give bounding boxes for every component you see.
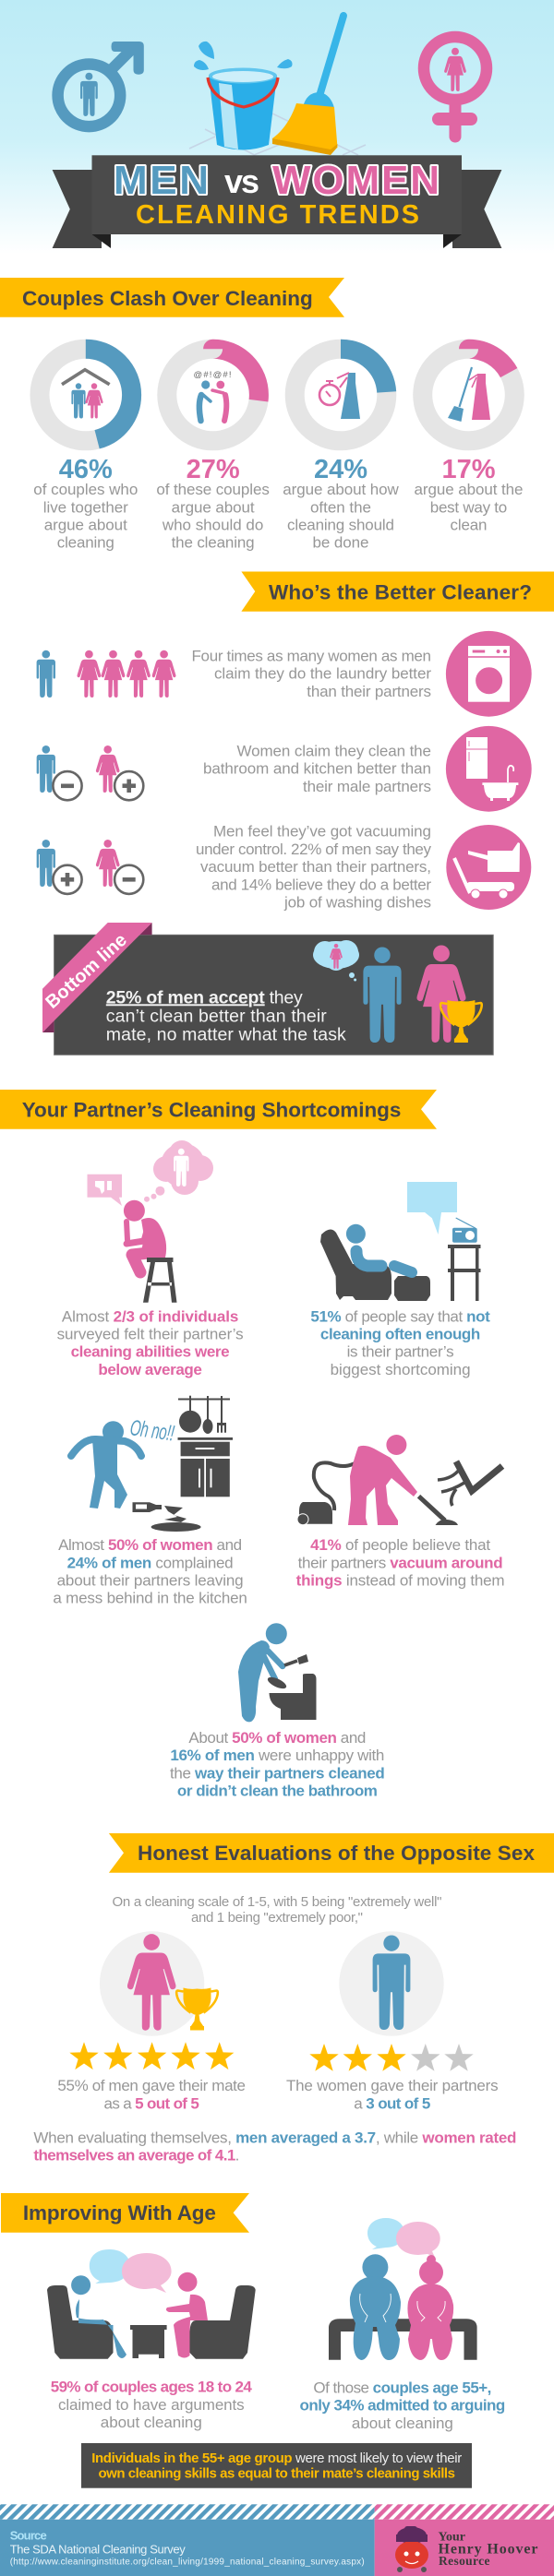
stat 46%: argue about bbox=[44, 516, 127, 533]
resource panel: Resource bbox=[439, 2554, 489, 2568]
source panel: (http://www.cleaninginstitute.org/clean_living/1999_national_cleaning_survey.aspx) bbox=[10, 2557, 365, 2567]
title ribbon: WOMEN bbox=[272, 158, 440, 203]
text: ages 18 to 24: about cleaning bbox=[101, 2414, 202, 2431]
row: bathroom figures bbox=[37, 745, 143, 800]
text: bathroom: Women claim they clean the bbox=[236, 742, 431, 759]
text: laundry: Four times as many women as men bbox=[192, 648, 431, 665]
text: 51% bbox=[310, 1307, 490, 1378]
banner bbox=[241, 572, 554, 612]
icon: washing machine bbox=[446, 631, 532, 717]
text: two thirds: cleaning abilities were bbox=[71, 1343, 230, 1361]
text: vacuum around: 41% of people believe that bbox=[310, 1536, 490, 1554]
scene: man in recliner with radio bbox=[320, 1182, 480, 1301]
text: bathroom complaint: or didn’t clean the bathroom bbox=[177, 1783, 378, 1800]
icon: arguing couple: @#!@#! bbox=[194, 370, 231, 380]
heading: Couples Clash Over Cleaning bbox=[22, 287, 313, 310]
text: kitchen bbox=[53, 1536, 247, 1606]
resource panel: Your bbox=[438, 2530, 465, 2544]
ottoman bbox=[394, 1276, 430, 1301]
icon: bucket bbox=[208, 68, 278, 149]
panel bbox=[54, 935, 493, 1055]
icon: cart bbox=[446, 825, 531, 910]
oh no text: Oh no!! bbox=[128, 1416, 176, 1447]
row: vacuum figures bbox=[37, 840, 143, 894]
scene: vacuuming around chair bbox=[297, 1435, 502, 1525]
icon: stopwatch and spray bbox=[319, 373, 360, 419]
donut 17% bbox=[423, 349, 514, 441]
text: vacuuming: vacuum better than their partners, bbox=[200, 858, 431, 876]
text: bathroom: their male partners bbox=[303, 778, 431, 795]
cabinet bbox=[177, 1437, 233, 1497]
figure: woman bbox=[348, 1435, 417, 1525]
stat 24% bbox=[283, 455, 399, 551]
text: 25% of men accept they bbox=[106, 987, 303, 1008]
text: ages 18 to 24 bbox=[51, 2379, 252, 2431]
source panel: Source bbox=[10, 2528, 47, 2542]
icon: male symbol bbox=[58, 42, 144, 126]
stat 27%: who should do bbox=[162, 516, 263, 533]
figure: man bbox=[238, 1623, 287, 1722]
section: who's the better cleaner bbox=[37, 572, 554, 911]
text: age 55+: about cleaning bbox=[352, 2415, 453, 2432]
text: age 55+: only 34% admitted to arguing bbox=[300, 2397, 505, 2415]
text: two thirds: below average bbox=[98, 1361, 202, 1378]
stat 46%: 46% bbox=[59, 455, 113, 484]
text: kitchen: about their partners leaving bbox=[57, 1571, 244, 1589]
resource panel bbox=[375, 2520, 554, 2576]
text: self evaluation: When evaluating themselves, men averaged a 3.7, while women rated bbox=[33, 2129, 516, 2146]
vacuum canister and hose bbox=[297, 1462, 458, 1525]
figure: man bbox=[363, 947, 402, 1043]
icon: plus bbox=[114, 771, 143, 800]
text: vacuum around bbox=[296, 1536, 505, 1589]
icon: couple under roof bbox=[62, 370, 110, 419]
text: vacuuming bbox=[196, 823, 432, 911]
icon: thought cloud bbox=[313, 940, 359, 982]
row: laundry figures bbox=[37, 650, 175, 698]
speech bubbles bbox=[90, 2249, 172, 2293]
text: bathroom complaint bbox=[170, 1729, 385, 1800]
stat 17%: best way to bbox=[430, 498, 507, 516]
text: 51%: biggest shortcoming bbox=[331, 1361, 471, 1378]
text: bathroom complaint: the way their partners cleaned bbox=[170, 1764, 385, 1782]
icon: female symbol bbox=[424, 37, 487, 137]
intro text: On a cleaning scale of 1-5, with 5 being "extremely well" bbox=[113, 1894, 441, 1910]
icon: water drops bbox=[194, 42, 292, 70]
left armchair bbox=[47, 2285, 113, 2359]
text: ages 18 to 24: claimed to have arguments bbox=[58, 2396, 245, 2414]
banner bbox=[0, 278, 344, 317]
caption: women rated: as a 5 out of 5 bbox=[104, 2095, 199, 2113]
banner bbox=[0, 1090, 437, 1129]
title: men vs women: MEN bbox=[114, 158, 209, 203]
man rating bbox=[339, 1931, 444, 2036]
stat 27%: 27% bbox=[187, 455, 240, 484]
stat 46%: of couples who bbox=[33, 481, 138, 498]
figure: seated man bbox=[71, 2275, 126, 2358]
stat 46%: live together bbox=[43, 498, 128, 516]
intro text: and 1 being "extremely poor," bbox=[191, 1910, 363, 1926]
icon: trophy bbox=[176, 1987, 218, 2030]
five stars bbox=[69, 2042, 234, 2069]
text: ages 18 to 24: 59% of couples ages 18 to 24 bbox=[51, 2379, 252, 2396]
figure: man bbox=[71, 1421, 141, 1509]
text: 51%: is their partner’s bbox=[347, 1343, 454, 1361]
figure: seated woman bbox=[166, 2272, 208, 2358]
heading: Improving With Age bbox=[23, 2201, 216, 2224]
text: bathroom: bathroom and kitchen better than bbox=[203, 760, 431, 778]
caption: men rated bbox=[286, 2077, 499, 2113]
brush bbox=[284, 1661, 297, 1665]
coffee table bbox=[130, 2325, 167, 2358]
banner bbox=[109, 1833, 554, 1873]
text: vacuuming: under control. 22% of men say they bbox=[196, 841, 432, 858]
section: shortcomings bbox=[0, 1090, 505, 1800]
speech bubbles bbox=[367, 2218, 440, 2257]
stat 24%: 24% bbox=[314, 455, 367, 484]
title ribbon bbox=[53, 155, 501, 248]
stat 24%: cleaning should bbox=[287, 516, 394, 533]
stat 17%: 17% bbox=[441, 455, 496, 484]
text: age 55+: Of those couples age 55+, bbox=[313, 2379, 491, 2396]
text: vacuuming: and 14% believe they do a better bbox=[211, 876, 431, 893]
stat 27%: the cleaning bbox=[172, 533, 255, 551]
subtitle: cleaning trends: CLEANING TRENDS bbox=[136, 200, 419, 230]
stat 17%: clean bbox=[451, 516, 488, 533]
resource panel: Henry Hoover bbox=[438, 2541, 537, 2557]
side table bbox=[448, 1245, 480, 1301]
figure: older man bbox=[350, 2254, 401, 2360]
text: mate, no matter what the task bbox=[106, 1024, 346, 1044]
floor tile lines bbox=[189, 113, 366, 155]
stat 27% bbox=[156, 455, 270, 551]
text: 51%: 51% of people say that not bbox=[310, 1307, 490, 1325]
stripes bbox=[0, 2504, 375, 2520]
section: honest evaluations bbox=[33, 1833, 554, 2165]
text: 51%: cleaning often enough bbox=[320, 1326, 480, 1343]
stat 46%: cleaning bbox=[57, 533, 114, 551]
donut 46% bbox=[40, 349, 132, 441]
heading: Honest Evaluations of the Opposite Sex bbox=[138, 1842, 535, 1865]
text: kitchen: a mess behind in the kitchen bbox=[53, 1589, 247, 1606]
text: self evaluation bbox=[33, 2129, 516, 2165]
section: couples clash bbox=[0, 278, 523, 551]
text: kitchen: 24% of men complained bbox=[67, 1554, 234, 1571]
woman rating bbox=[100, 1931, 218, 2036]
hanging utensils bbox=[178, 1396, 230, 1434]
scene: cleaning the toilet bbox=[238, 1623, 316, 1722]
speech box bbox=[407, 1182, 457, 1234]
caption: men rated: The women gave their partners bbox=[286, 2077, 499, 2094]
stat 24%: often the bbox=[310, 498, 371, 516]
text: two thirds: Almost 2/3 of individuals bbox=[62, 1307, 238, 1325]
footer bbox=[0, 2504, 554, 2576]
scene: kitchen mess bbox=[71, 1396, 233, 1532]
figure: older woman bbox=[407, 2255, 453, 2360]
right armchair bbox=[190, 2285, 256, 2359]
text: laundry: than their partners bbox=[307, 683, 431, 700]
text: vacuuming: Men feel they’ve got vacuuming bbox=[213, 823, 431, 841]
stat 17% bbox=[414, 455, 523, 533]
text: self evaluation: themselves an average of 4.1. bbox=[33, 2147, 239, 2165]
figure: woman bbox=[416, 945, 466, 1043]
text: bathroom complaint: 16% of men were unhappy with bbox=[170, 1747, 384, 1764]
heading: Who’s the Better Cleaner? bbox=[269, 580, 532, 603]
text: can’t clean better than their bbox=[106, 1006, 327, 1026]
icon: trophy bbox=[440, 1000, 482, 1043]
callout: 55+ cleaning skills: own cleaning skills as equal to their mate’s cleaning skills bbox=[98, 2466, 455, 2482]
icon: mop bbox=[272, 16, 343, 155]
text: vacuum around: their partners vacuum around bbox=[298, 1554, 503, 1571]
stat 24%: argue about how bbox=[283, 481, 399, 498]
text: laundry bbox=[192, 648, 431, 700]
three of five stars bbox=[309, 2044, 474, 2071]
toilet bbox=[270, 1674, 316, 1720]
callout: 55+ cleaning skills: Individuals in the 55+ age group were most likely to view their bbox=[91, 2451, 462, 2466]
text: two thirds bbox=[57, 1307, 244, 1378]
radio bbox=[452, 1218, 477, 1243]
speech box with thumbs down bbox=[87, 1175, 122, 1206]
donut 24% bbox=[295, 349, 387, 441]
text: vacuum around: things instead of moving them bbox=[296, 1571, 505, 1589]
header bbox=[0, 0, 554, 254]
spilled bottle bbox=[133, 1502, 201, 1532]
callout: bottom line bbox=[42, 923, 493, 1055]
section: improving with age bbox=[1, 2193, 505, 2488]
text: laundry: claim they do the laundry better bbox=[214, 665, 431, 683]
donut 27% bbox=[167, 349, 259, 441]
icon: fridge and bath bbox=[446, 726, 532, 812]
caption: women rated bbox=[57, 2077, 246, 2113]
text: age 55+ bbox=[300, 2379, 505, 2432]
text bbox=[106, 987, 346, 1044]
icon: minus bbox=[114, 865, 143, 894]
overturned chair bbox=[438, 1461, 502, 1506]
caption: men rated: a 3 out of 5 bbox=[354, 2095, 430, 2113]
stat 46% bbox=[33, 455, 138, 551]
stat 27%: of these couples bbox=[156, 481, 270, 498]
stat 24%: be done bbox=[312, 533, 369, 551]
stat 17%: argue about the bbox=[414, 481, 523, 498]
callout: 55+ cleaning skills bbox=[81, 2443, 472, 2488]
heading: Your Partner’s Cleaning Shortcomings bbox=[22, 1099, 401, 1122]
intro text bbox=[113, 1894, 441, 1926]
recliner bbox=[320, 1229, 391, 1300]
text: two thirds: surveyed felt their partner’s bbox=[57, 1326, 244, 1343]
source panel: The SDA National Cleaning Survey bbox=[10, 2543, 186, 2557]
stat 27%: argue about bbox=[172, 498, 255, 516]
icon: minus bbox=[53, 771, 82, 800]
icon: mop and spray bbox=[448, 367, 490, 422]
stool bbox=[143, 1258, 177, 1303]
title ribbon: vs bbox=[224, 162, 259, 200]
ribbon bbox=[42, 923, 152, 1032]
text: vacuuming: job of washing dishes bbox=[283, 893, 431, 911]
caption: women rated: 55% of men gave their mate bbox=[57, 2077, 246, 2094]
figure: seated man bbox=[346, 1224, 366, 1244]
ribbon: Bottom line bbox=[42, 930, 131, 1013]
bench bbox=[329, 2319, 477, 2360]
scene: young couple bbox=[47, 2249, 256, 2359]
text: bathroom bbox=[203, 742, 431, 795]
icon: plus bbox=[53, 865, 82, 894]
text: bathroom complaint: About 50% of women and bbox=[188, 1729, 366, 1747]
scene: older couple bbox=[329, 2218, 477, 2360]
thought cloud bbox=[144, 1140, 213, 1202]
sky gradient bbox=[0, 0, 554, 254]
icon: henry hoover bbox=[395, 2526, 428, 2572]
scene: thinking person on stool bbox=[87, 1140, 213, 1303]
source panel bbox=[0, 2520, 375, 2576]
banner bbox=[1, 2193, 249, 2233]
text: kitchen: Almost 50% of women and bbox=[58, 1536, 242, 1554]
